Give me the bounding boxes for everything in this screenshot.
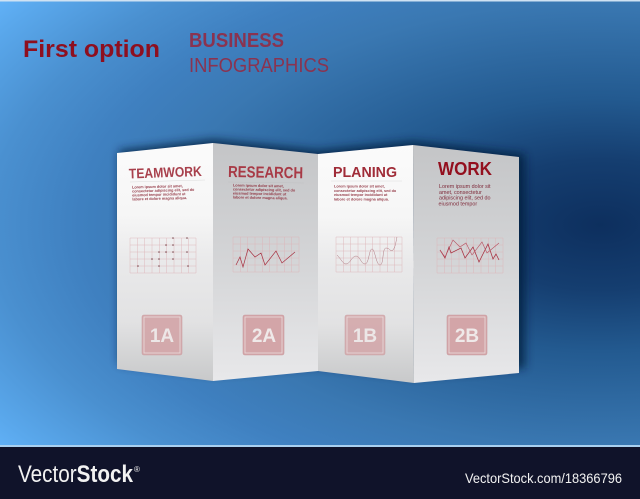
- panel: teamwork: labore et dolore magna aliqua.: [132, 196, 187, 201]
- panel: planing: eiusmod tempor incididunt ut: [334, 193, 388, 197]
- folded brochure: [117, 139, 525, 383]
- panel: research: eiusmod tempor incididunt ut: [233, 191, 287, 196]
- heading: business infographics: [189, 30, 329, 77]
- badge: 1A: [142, 315, 182, 355]
- footer bar: [0, 445, 640, 499]
- panel: work: adipiscing elit, sed do: [439, 196, 491, 202]
- panel: planing: PLANING: [333, 164, 397, 181]
- badge: 1B: [345, 315, 385, 355]
- panel: teamwork: Lorem ipsum dolor sit amet,: [132, 184, 183, 189]
- panel: work: Lorem ipsum dolor sit: [439, 184, 491, 190]
- panel: teamwork: eiusmod tempor incididunt ut: [132, 192, 186, 197]
- badge: 2B: [447, 315, 487, 355]
- badge: 1A: 1A: [150, 326, 174, 347]
- image id: VectorStock.com/18366796: [465, 470, 622, 486]
- panel: research: RESEARCH: [228, 164, 303, 182]
- badge: 2B: 2B: [455, 326, 479, 347]
- panel: research: [213, 143, 318, 381]
- panel: teamwork: consectetur adipiscing elit, sed do: [132, 188, 195, 193]
- panel: teamwork: TEAMWORK: [129, 163, 202, 181]
- panel: planing: labore et dolore magna aliqua.: [334, 198, 389, 202]
- panel: research: Lorem ipsum dolor sit amet,: [233, 184, 284, 188]
- badge: 2A: 2A: [252, 326, 276, 347]
- heading: business infographics: INFOGRAPHICS: [189, 55, 329, 77]
- chart: scatter: [130, 237, 196, 273]
- chart: multi-line: [437, 238, 503, 273]
- heading: business infographics: BUSINESS: [189, 30, 284, 52]
- logo: VectorStock: VectorStock: [18, 461, 134, 488]
- panel: planing: [318, 145, 414, 383]
- panel: research: consectetur adipiscing elit, sed do: [233, 187, 296, 193]
- panel: work: eiusmod tempor: [438, 202, 477, 208]
- panel: work: [413, 145, 519, 383]
- panel: planing: consectetur adipiscing elit, sed do: [334, 189, 397, 193]
- panel: research: labore et dolore magna aliqua.: [233, 195, 288, 200]
- badge: 1B: 1B: [353, 326, 377, 347]
- logo mark: registered: ®: [134, 465, 140, 474]
- panel: work: amet, consectetur: [439, 190, 482, 196]
- chart: line: [233, 237, 299, 272]
- panel: work: WORK: [438, 159, 492, 179]
- badge: 2A: [243, 315, 284, 355]
- title: First option: First option: [23, 36, 160, 63]
- panel: planing: Lorem ipsum dolor sit amet,: [334, 184, 385, 188]
- panel: teamwork: [117, 143, 213, 381]
- chart: curve: [336, 237, 402, 272]
